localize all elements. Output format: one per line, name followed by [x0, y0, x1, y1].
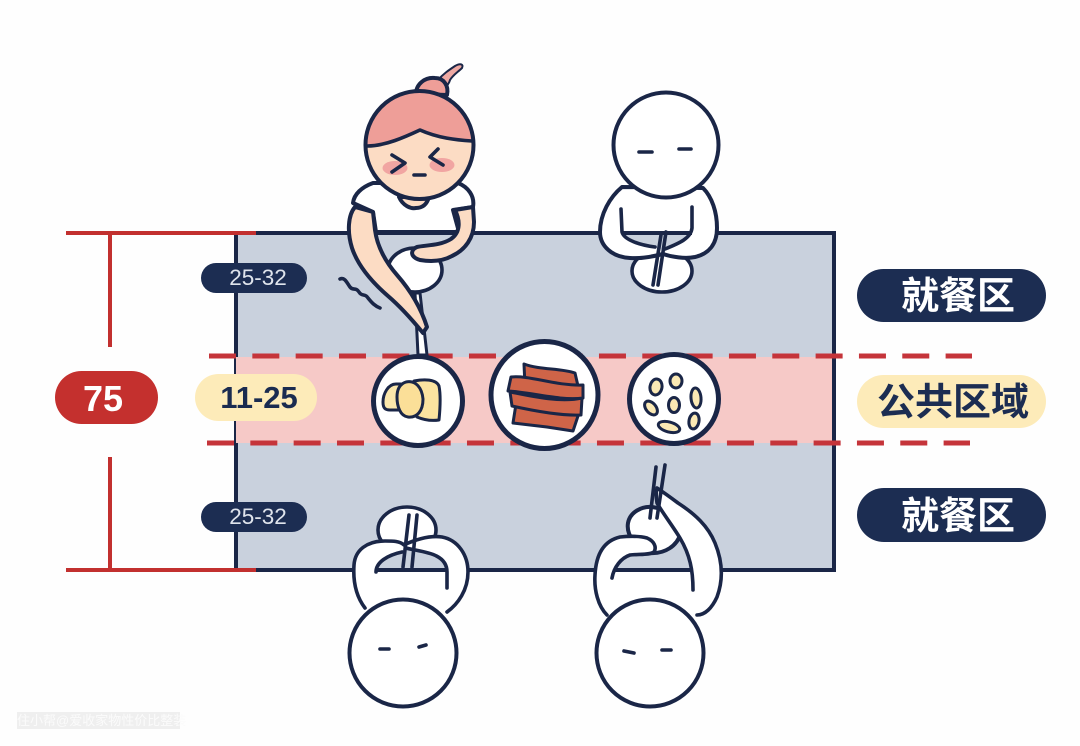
label: public zone: 公共区域: [877, 382, 1029, 424]
bowl: [628, 507, 681, 553]
watermark: 住小帮@爱收家物性价比整装: [17, 713, 186, 728]
collar: [399, 197, 429, 208]
chopsticks: [415, 293, 427, 355]
figure: girl in pain: [340, 64, 474, 355]
figure: bottom left diner: [350, 507, 468, 706]
plate: meat: [491, 342, 598, 448]
label: 11-25: 11-25: [220, 380, 298, 415]
label: upper 25-32: 25-32: [229, 265, 287, 290]
dimension bracket: 75: [55, 233, 256, 570]
shirt: [353, 183, 473, 232]
plate: small pieces: [630, 354, 718, 444]
squiggle: [340, 279, 380, 308]
label: public zone: [857, 375, 1046, 428]
label: 11-25: [195, 374, 317, 421]
dining table: [207, 233, 972, 570]
hair tail: [438, 64, 463, 88]
label: upper 25-32: [201, 263, 307, 293]
public zone band: [236, 357, 832, 443]
dimension bracket: 75: 75: [83, 378, 123, 419]
chopsticks: [650, 465, 665, 518]
label: upper dining zone: [857, 269, 1046, 322]
label: lower 25-32: [201, 502, 307, 532]
figure: top right diner: [600, 92, 718, 292]
left arm: [595, 536, 655, 615]
figure: bottom right diner: [595, 465, 721, 706]
hair: [367, 92, 472, 146]
bowl: [388, 248, 442, 292]
label: upper dining zone: 就餐区: [901, 276, 1015, 318]
plate: tofu: [374, 356, 462, 446]
body below table edge: [607, 570, 697, 615]
label: lower 25-32: 25-32: [229, 504, 287, 529]
cheeks: [382, 161, 408, 175]
right arm: [412, 207, 474, 261]
head: [366, 91, 474, 199]
label: lower dining zone: 就餐区: [901, 496, 1015, 538]
face: [392, 149, 443, 175]
right arm: [656, 488, 721, 615]
bun: [416, 78, 447, 95]
left arm: [349, 207, 427, 333]
label: lower dining zone: [857, 488, 1046, 542]
